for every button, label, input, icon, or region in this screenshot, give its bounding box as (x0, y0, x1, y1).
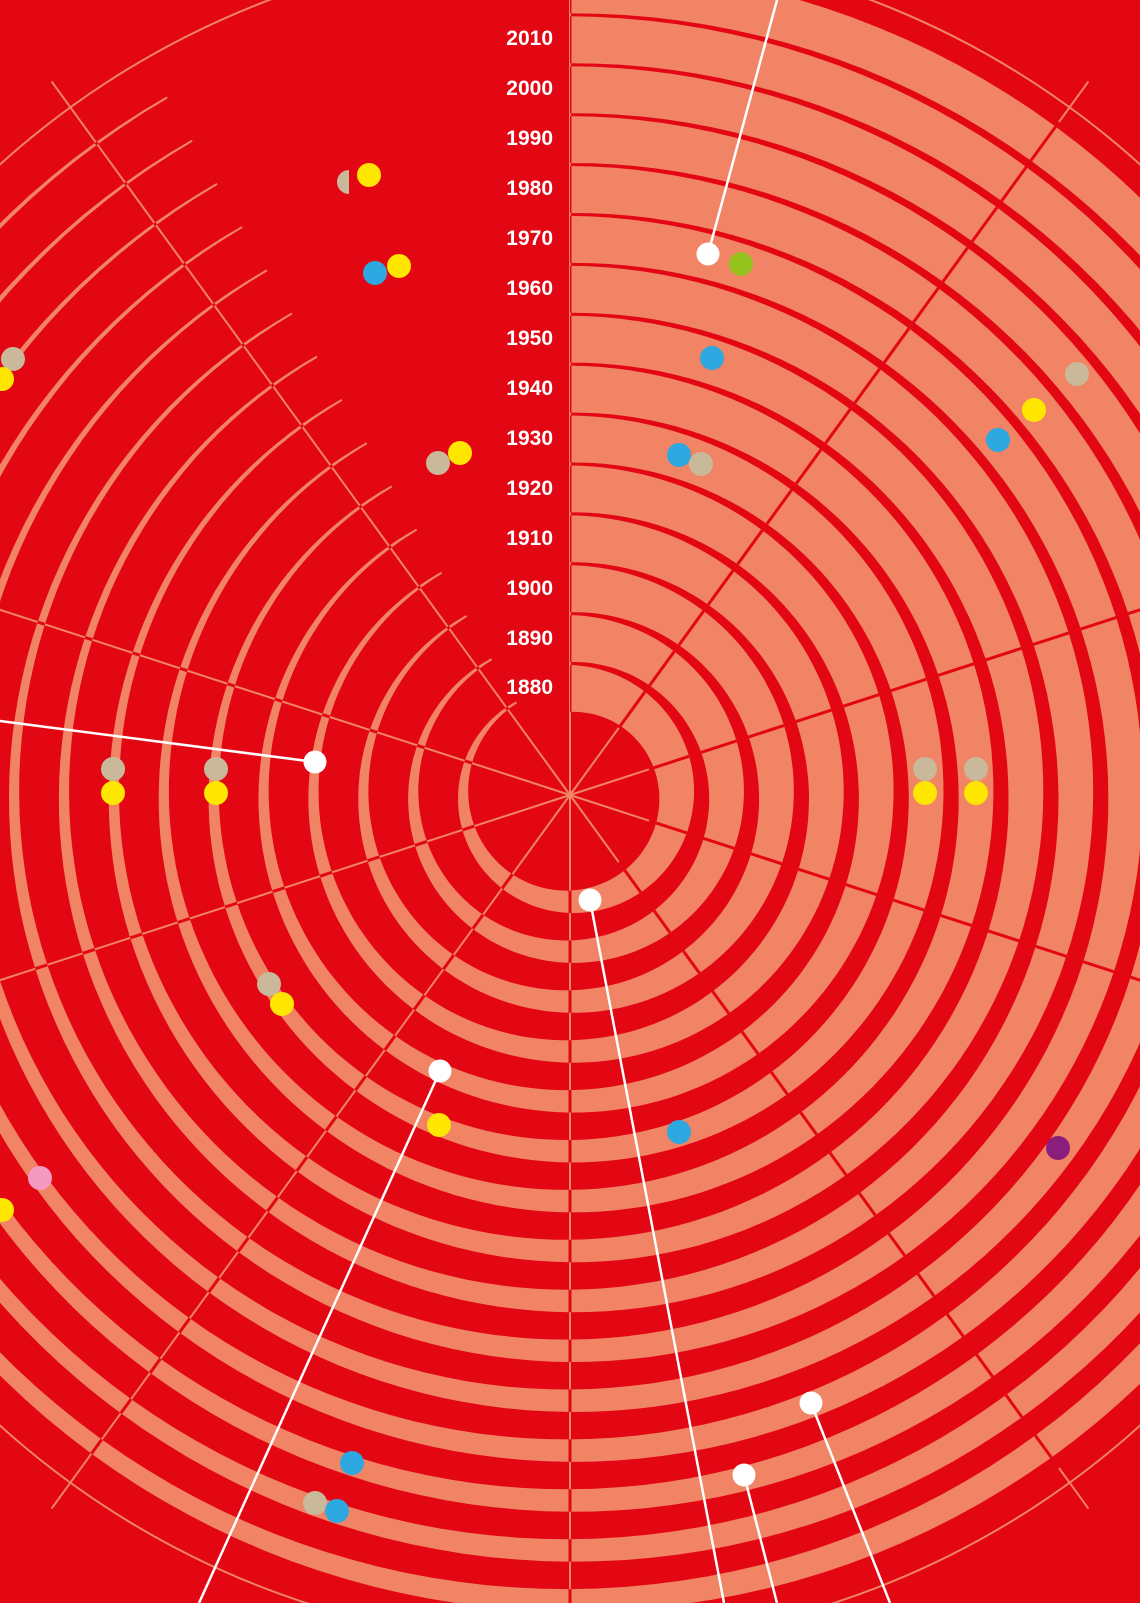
year labels (506, 27, 553, 699)
pointer lines (0, 0, 890, 1603)
year labels: 1910 (506, 527, 553, 550)
year labels: 1890 (506, 627, 553, 650)
year labels: 1920 (506, 477, 553, 500)
year labels: 1950 (506, 327, 553, 350)
year labels: 1940 (506, 377, 553, 400)
year labels: 1880 (506, 676, 553, 699)
year labels: 2000 (506, 77, 553, 100)
year labels: 2010 (506, 27, 553, 50)
white marker dots (304, 242, 822, 1486)
year labels: 1900 (506, 577, 553, 600)
year labels: 1960 (506, 277, 553, 300)
year labels: 1970 (506, 227, 553, 250)
year labels: 1930 (506, 427, 553, 450)
year labels: 1990 (506, 127, 553, 150)
year labels: 1980 (506, 177, 553, 200)
